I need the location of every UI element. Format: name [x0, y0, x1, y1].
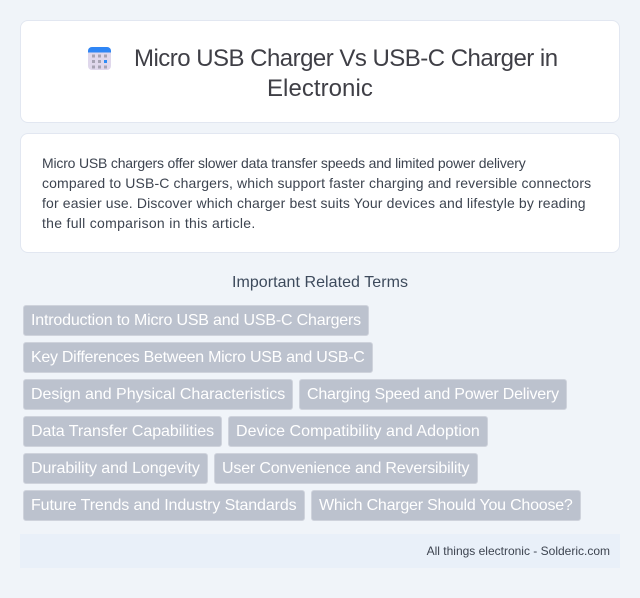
title [134, 45, 558, 102]
tag [228, 416, 488, 447]
tag: Introduction to Micro USB and USB-C Chargers [31, 312, 361, 329]
tag list [23, 305, 581, 521]
tag: Device Compatibility and Adoption [236, 423, 480, 440]
description text: compared to USB-C chargers, which support faster charging and reversible connectors [42, 175, 591, 191]
tag: User Convenience and Reversibility [222, 460, 469, 477]
tag: Future Trends and Industry Standards [31, 497, 297, 514]
tag: Data Transfer Capabilities [31, 423, 214, 440]
section heading: Important Related Terms [232, 274, 408, 291]
tag: Design and Physical Characteristics [31, 386, 285, 403]
tag: Key Differences Between Micro USB and USB-C [31, 349, 365, 366]
tag [23, 490, 305, 521]
tag [23, 453, 208, 484]
header panel [20, 20, 620, 123]
description text [42, 155, 591, 231]
tag [23, 379, 293, 410]
title: Micro USB Charger Vs USB-C Charger in [134, 45, 558, 72]
description text: the full comparison in this article. [42, 215, 256, 231]
tag [23, 342, 373, 373]
title: Electronic [267, 75, 373, 102]
tag: Charging Speed and Power Delivery [307, 386, 559, 403]
tag [299, 379, 567, 410]
footer bar: All things electronic - Solderic.com [427, 544, 610, 558]
tag [214, 453, 478, 484]
description panel [20, 133, 620, 253]
icon: calendar [88, 47, 111, 70]
tag: Which Charger Should You Choose? [319, 497, 573, 514]
tag [311, 490, 581, 521]
description text: for easier use. Discover which charger best suits Your devices and lifestyle by reading [42, 195, 586, 211]
tag [23, 305, 369, 336]
footer bar [20, 534, 620, 568]
description text: Micro USB chargers offer slower data transfer speeds and limited power delivery [42, 155, 526, 171]
tag [23, 416, 222, 447]
tag: Durability and Longevity [31, 460, 200, 477]
